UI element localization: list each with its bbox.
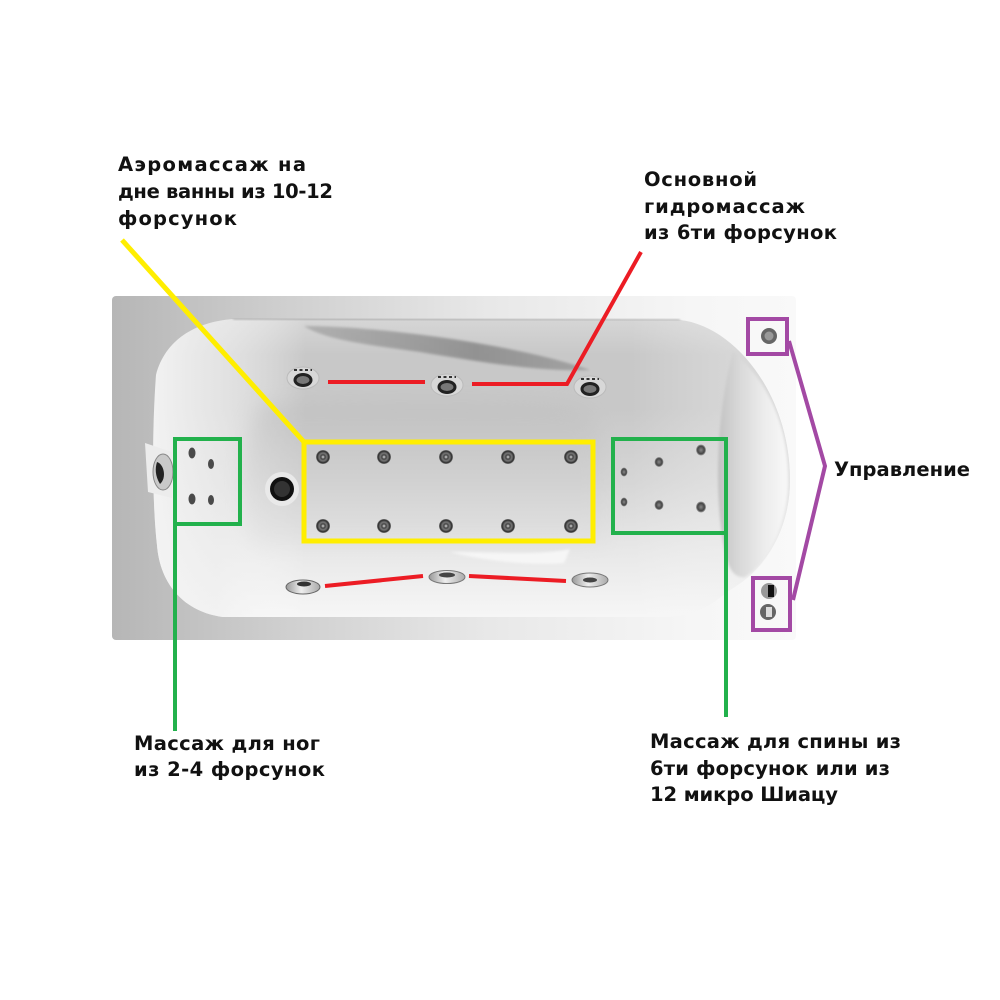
bathtub photo [112,296,796,640]
green callout: foot massage zone and leader [175,439,240,731]
label: back massage: 12 микро Шиацу [650,783,838,806]
label: back massage: 6ти форсунок или из [650,757,890,780]
label: aeromassage: дне ванны из 10-12 [118,180,333,203]
label: main hydromassage: Основной [644,168,757,191]
label: aeromassage: форсунок [118,207,237,230]
green callout: back massage zone and leader [613,439,726,717]
label: foot massage: из 2-4 форсунок [134,758,325,781]
overflow fitting [145,443,173,498]
yellow callout: aeromassage zone and leader [122,240,593,541]
foot jets [188,448,214,505]
backrest moulding [304,326,590,370]
purple callout: controls zones and bracket [748,319,825,630]
main hydromassage jets [286,367,608,594]
red callout: hydromassage leader top [325,252,641,586]
back jets [620,444,706,512]
aeromassage jets [316,450,578,533]
basin floor [244,402,606,545]
tub rim [112,296,796,640]
basin top edge [233,319,680,320]
tub basin [153,319,790,617]
basin light shading [153,319,790,617]
drain [265,472,299,506]
headrest pillow [718,352,788,577]
floor highlight [450,549,570,564]
control knobs [760,328,777,620]
label: main hydromassage: из 6ти форсунок [644,221,837,244]
label: foot massage: Массаж для ног [134,732,320,755]
label: back massage: Массаж для спины из [650,730,901,753]
label: aeromassage: Аэромассаж на [118,153,306,176]
label: controls: Управление [834,458,970,481]
label: main hydromassage: гидромассаж [644,195,806,218]
